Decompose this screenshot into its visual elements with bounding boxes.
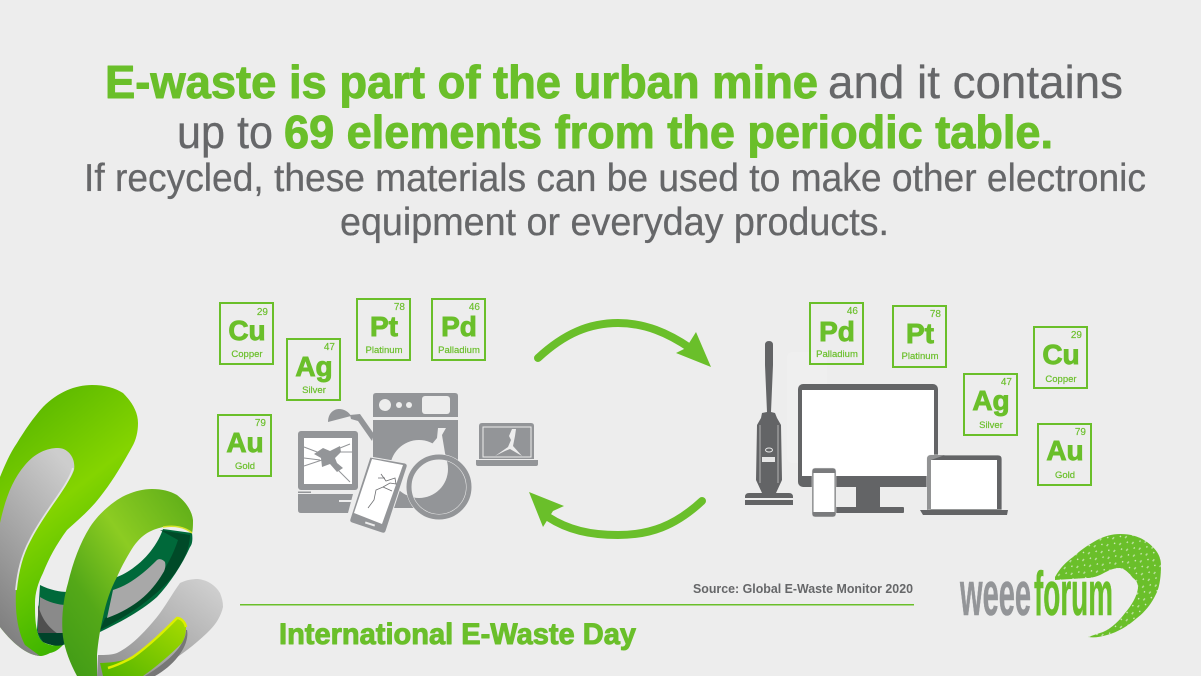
new products elements: copper: 29: [1071, 330, 1082, 341]
new products elements: gold: [1038, 424, 1091, 485]
e-waste elements: copper: 29: [257, 307, 268, 318]
heading: E-waste is part of the urban mine: [105, 56, 818, 108]
logo: WEEE Forum: weee: [960, 560, 1031, 629]
new products elements: silver: 47: [1001, 377, 1012, 388]
new products elements: gold: Gold: [1055, 470, 1075, 481]
new products elements: platinum: Platinum: [902, 351, 939, 362]
e-waste elements: palladium: Palladium: [438, 345, 480, 356]
logo swirl: International E-Waste Day: [0, 385, 223, 676]
e-waste elements: gold: Gold: [235, 461, 255, 472]
subheading: equipment or everyday products.: [340, 201, 889, 244]
e-waste elements: silver: Silver: [302, 385, 326, 396]
e-waste elements: palladium: 46: [469, 302, 480, 313]
new products elements: palladium: Palladium: [816, 349, 858, 360]
e-waste elements: palladium: Pd: [441, 311, 477, 342]
heading: up to: [177, 106, 273, 158]
e-waste elements: gold: Au: [226, 427, 264, 458]
arrow: back to e-waste: [529, 492, 702, 535]
new products elements: palladium: Pd: [819, 316, 855, 347]
e-waste elements: silver: 47: [324, 342, 335, 353]
e-waste elements: copper: [220, 303, 273, 364]
e-waste elements: platinum: [357, 299, 410, 360]
new products elements: copper: Copper: [1045, 374, 1077, 385]
heading: 69 elements from the periodic table.: [284, 106, 1053, 158]
subheading: [84, 157, 1146, 244]
footer title: International E-Waste Day: [279, 618, 636, 651]
new products elements: silver: Silver: [979, 420, 1003, 431]
e-waste elements: platinum: Pt: [370, 311, 398, 342]
e-waste elements: silver: Ag: [295, 351, 333, 382]
logo: WEEE Forum: [960, 534, 1161, 637]
source: Source: Global E-Waste Monitor 2020: [693, 581, 913, 596]
icon: new electronics: [745, 341, 1008, 517]
footer line: [240, 604, 914, 606]
new products elements: platinum: [893, 306, 946, 367]
new products elements: silver: [964, 374, 1017, 435]
e-waste elements: platinum: Platinum: [366, 345, 403, 356]
heading: [105, 56, 1123, 158]
icon: broken electronics: [298, 393, 538, 533]
e-waste elements: gold: 79: [255, 418, 266, 429]
e-waste elements: palladium: [432, 299, 485, 360]
e-waste elements: copper: Cu: [228, 315, 266, 346]
new products elements: palladium: [810, 303, 863, 364]
heading: and it contains: [828, 56, 1123, 108]
new products elements: platinum: 78: [930, 309, 941, 320]
e-waste elements: silver: [287, 339, 340, 400]
e-waste elements: platinum: 78: [394, 302, 405, 313]
new products elements: gold: 79: [1075, 427, 1086, 438]
new products elements: platinum: Pt: [906, 318, 934, 349]
new products elements: copper: [1034, 327, 1087, 388]
e-waste elements: copper: Copper: [231, 349, 263, 360]
new products elements: gold: Au: [1046, 435, 1084, 466]
subheading: If recycled, these materials can be used to make other electronic: [84, 157, 1146, 200]
new products elements: copper: Cu: [1042, 339, 1080, 370]
new products elements: palladium: 46: [847, 306, 858, 317]
e-waste elements: gold: [218, 415, 271, 476]
new products elements: silver: Ag: [972, 385, 1010, 416]
arrow: to new products: [538, 323, 711, 367]
